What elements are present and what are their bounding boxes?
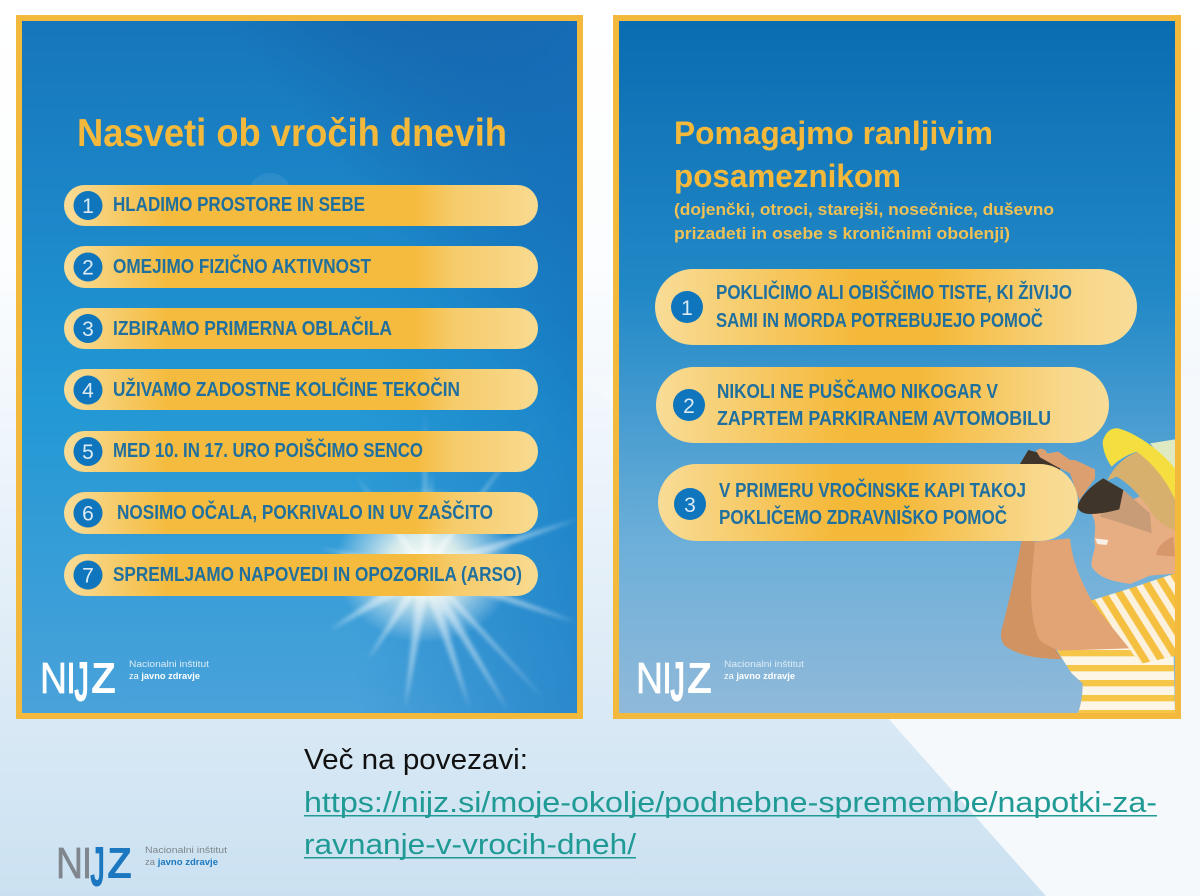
tip 5: MED 10. IN 17. URO POIŠČIMO SENCO (113, 438, 423, 462)
hat brim (1103, 428, 1175, 499)
subheading: prizadeti in osebe s kroničnimi obolenji) (674, 224, 1010, 243)
back arm (1001, 540, 1062, 659)
tip 6: NOSIMO OČALA, POKRIVALO IN UV ZAŠČITO (117, 500, 493, 524)
logo: NIJZ white: I (66, 654, 76, 703)
logo: NIJZ white right: I (662, 654, 672, 703)
logo: NIJZ white: N (40, 654, 67, 703)
heading: Nasveti ob vročih dnevih (77, 112, 507, 155)
logo: NIJZ white right: N (636, 654, 663, 703)
front arm (1031, 538, 1129, 651)
heading: Pomagajmo ranljivim (674, 115, 993, 151)
logo: NIJZ white right: Z (687, 654, 712, 703)
help item 1: 1 (681, 297, 693, 320)
help item 3: 3 (684, 494, 696, 517)
tip 1: 1 (82, 195, 94, 218)
link text: https://nijz.si/moje-okolje/podnebne-spremembe/napotki-za- (304, 787, 1157, 819)
binoculars (1019, 450, 1123, 514)
tip 4 (64, 369, 538, 410)
tip 5 (64, 431, 538, 472)
hands (1036, 449, 1095, 500)
sun with rays (248, 173, 578, 712)
logo: NIJZ white right: Nacionalni inštitut (724, 659, 805, 669)
help item 1 (655, 269, 1137, 345)
subheading (674, 200, 1054, 243)
help item 2: NIKOLI NE PUŠČAMO NIKOGAR V (717, 379, 999, 403)
tip 7 (64, 554, 538, 596)
help item 3: POKLIČEMO ZDRAVNIŠKO POMOČ (719, 505, 1007, 529)
smile (1095, 538, 1108, 545)
shirt torso (1057, 643, 1175, 715)
logo: NIJZ white: Z (91, 654, 116, 703)
tip 4: 4 (82, 380, 94, 402)
tip 2 (64, 246, 538, 288)
tip 3: IZBIRAMO PRIMERNA OBLAČILA (113, 316, 392, 340)
logo: NIJZ footer: za javno zdravje (145, 857, 218, 867)
tip 3: 3 (82, 318, 94, 341)
face (1092, 493, 1177, 584)
tip 4: UŽIVAMO ZADOSTNE KOLIČINE TEKOČIN (113, 377, 460, 401)
ear (1156, 537, 1175, 557)
subheading: (dojenčki, otroci, starejši, nosečnice, duševno (674, 200, 1054, 219)
logo: NIJZ white: Nacionalni inštitut (129, 659, 210, 669)
text: Več na povezavi: Več na povezavi: (304, 744, 528, 776)
tip 7: SPREMLJAMO NAPOVEDI IN OPOZORILA (ARSO) (113, 564, 522, 586)
logo: NIJZ footer: I (82, 839, 92, 888)
logo: NIJZ white (40, 650, 210, 714)
tip 1 (64, 185, 538, 226)
tip 6: 6 (82, 502, 94, 526)
hair (1107, 452, 1175, 530)
help item 3 (658, 464, 1078, 541)
logo: NIJZ white: za javno zdravje (129, 671, 200, 681)
hat crown (1150, 439, 1175, 468)
logo: NIJZ white right: za javno zdravje (724, 671, 795, 681)
tip 2: OMEJIMO FIZIČNO AKTIVNOST (113, 254, 371, 278)
panel: Pomagajmo ranljivim posameznikom (613, 15, 1181, 719)
help item 2 (656, 367, 1109, 443)
help item 1: POKLIČIMO ALI OBIŠČIMO TISTE, KI ŽIVIJO (716, 280, 1072, 304)
logo: NIJZ footer (56, 835, 228, 896)
panel: Nasveti ob vročih dnevih (16, 15, 583, 719)
help item 1: SAMI IN MORDA POTREBUJEJO POMOČ (716, 308, 1043, 332)
logo: NIJZ white right (636, 650, 805, 714)
tip 5: 5 (82, 441, 94, 464)
link text: ravnanje-v-vrocih-dneh/ (304, 829, 637, 861)
heading (674, 115, 993, 194)
tip 2: 2 (82, 256, 94, 280)
logo: NIJZ white right: J (670, 650, 685, 714)
logo: NIJZ footer: Nacionalni inštitut (145, 845, 228, 855)
help item 2: ZAPRTEM PARKIRANEM AVTOMOBILU (717, 408, 1051, 430)
tip 1: HLADIMO PROSTORE IN SEBE (113, 194, 365, 216)
sleeve (1091, 573, 1175, 664)
logo: NIJZ footer: Z (107, 839, 132, 888)
link text (304, 787, 1157, 861)
heading: posameznikom (674, 158, 901, 194)
eye shadow on face (1100, 490, 1152, 533)
help item 2: 2 (683, 395, 695, 418)
logo: NIJZ footer: N (56, 839, 83, 888)
tip 6 (64, 492, 538, 534)
logo: NIJZ white: J (74, 650, 89, 714)
tip 7: 7 (82, 564, 94, 588)
tip 3 (64, 308, 538, 349)
help item 3: V PRIMERU VROČINSKE KAPI TAKOJ (719, 478, 1026, 502)
illustration: child with binoculars and yellow hat (1001, 428, 1177, 715)
